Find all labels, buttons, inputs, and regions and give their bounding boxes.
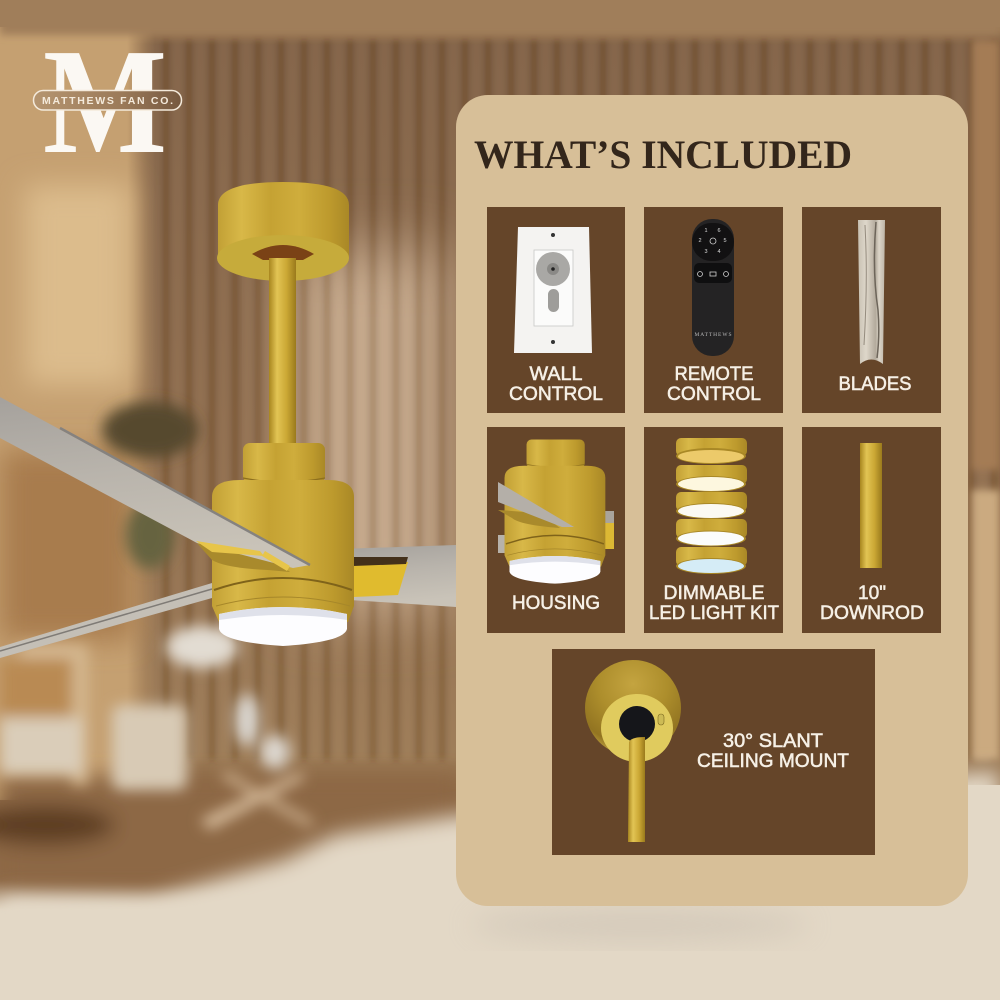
card: blades	[802, 207, 941, 413]
ceiling fan product photo	[0, 182, 456, 658]
panel shadow	[470, 909, 810, 941]
label: 10"	[858, 582, 886, 604]
label: LED LIGHT KIT	[649, 602, 779, 624]
label: CONTROL	[509, 383, 603, 405]
icon: remote	[692, 219, 734, 356]
blurred chair and furniture	[0, 626, 315, 830]
icon: downrod	[860, 443, 882, 568]
icon: remote: 5	[723, 238, 727, 244]
label: CONTROL	[667, 383, 761, 405]
icon: remote: 6	[717, 228, 721, 234]
icon: housing	[498, 440, 614, 584]
ceiling band	[0, 0, 1000, 35]
icon: wall control	[514, 227, 592, 353]
fan downrod	[269, 258, 296, 447]
label: WALL	[530, 363, 583, 385]
title: WHAT’S INCLUDED	[474, 132, 852, 177]
card: remote control	[644, 207, 783, 413]
label	[667, 363, 761, 405]
label: 30° SLANT	[723, 730, 823, 752]
card: wall control	[487, 207, 625, 413]
logo: Matthews Fan Co.: MATTHEWS FAN CO.	[42, 95, 173, 107]
blurred rug and floor	[0, 775, 460, 890]
icon: slant mount	[585, 660, 681, 842]
label	[820, 582, 924, 624]
fan right blade	[338, 545, 456, 607]
card: 10 inch downrod	[802, 427, 941, 633]
label: BLADES	[838, 373, 912, 395]
icon: remote: 1	[704, 228, 708, 234]
card: dimmable LED light kit	[644, 427, 783, 633]
card: 30 degree slant ceiling mount	[552, 649, 875, 855]
icon: stacked LED rings	[676, 438, 747, 574]
icon: remote: 4	[717, 249, 721, 255]
label	[509, 363, 603, 405]
label: HOUSING	[512, 592, 600, 614]
logo: Matthews Fan Co.: M	[43, 18, 167, 185]
label: CEILING MOUNT	[697, 750, 849, 772]
fan front blade	[0, 397, 310, 572]
fan canopy	[217, 182, 349, 281]
card: housing	[487, 427, 625, 633]
label: DIMMABLE	[664, 582, 764, 604]
fan left lower blade	[0, 583, 212, 658]
icon: remote: MATTHEWS	[694, 332, 732, 338]
icon: remote: 2	[698, 238, 702, 244]
fan housing	[212, 443, 354, 646]
icon: blade	[858, 220, 885, 364]
panel: what's included	[456, 95, 968, 906]
icon: remote: 3	[704, 249, 708, 255]
label	[697, 730, 849, 772]
blurred plant	[102, 402, 198, 569]
label: DOWNROD	[820, 602, 924, 624]
label	[649, 582, 779, 624]
label: REMOTE	[674, 363, 754, 385]
